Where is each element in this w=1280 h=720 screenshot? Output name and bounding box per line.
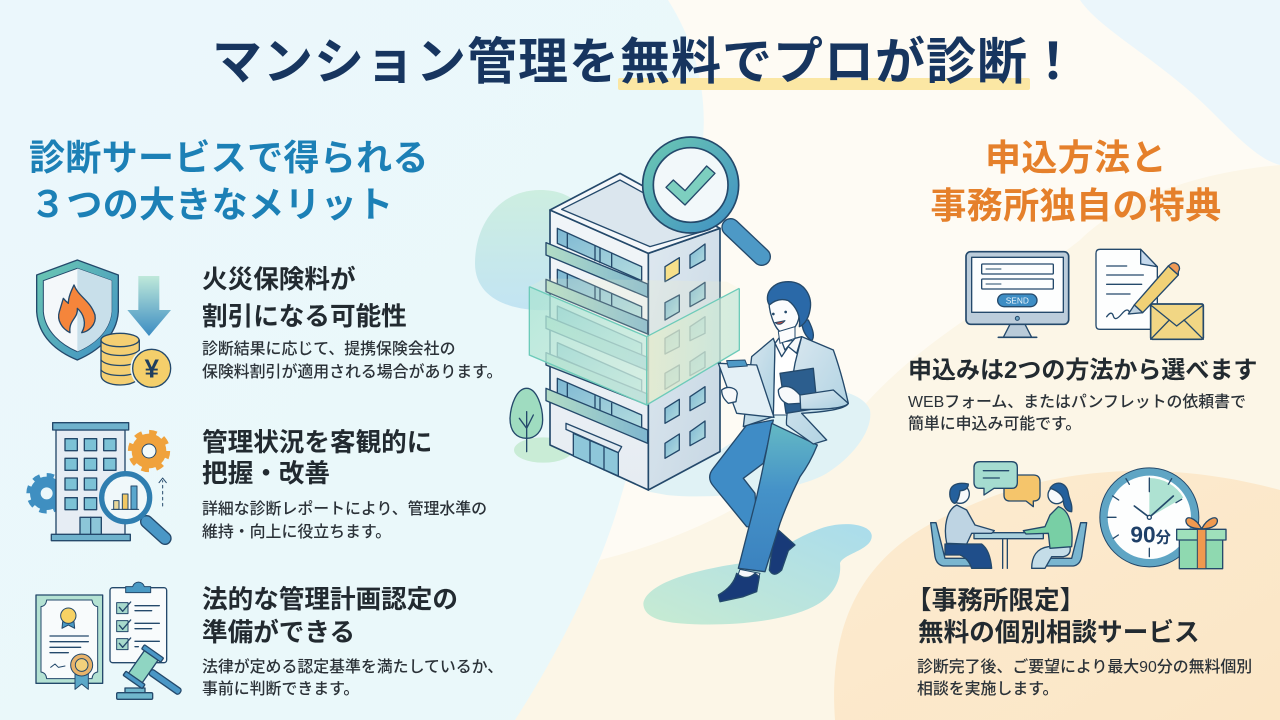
text: office-limited consultation	[906, 586, 1252, 698]
text: legal certification: 事前に判断できます。	[202, 680, 359, 698]
text: management status: 維持・向上に役立ちます。	[202, 523, 391, 541]
text: application methods	[908, 357, 1257, 433]
heading: merits	[29, 137, 429, 225]
heading: application and benefit: 事務所独自の特典	[930, 185, 1222, 226]
text: fire insurance: 火災保険料が	[202, 264, 356, 294]
text: office-limited consultation: 無料の個別相談サービス	[918, 618, 1200, 647]
icon: paper form, pencil and envelope	[1096, 249, 1203, 339]
text: office-limited consultation: 診断完了後、ご要望により最大90分の無料個別	[917, 658, 1252, 676]
text: legal certification: 準備ができる	[202, 617, 355, 647]
title text: マンション管理を無料でプロが診断！	[212, 34, 1079, 90]
text: legal certification	[202, 585, 503, 698]
icon: fire insurance discount: ¥	[144, 353, 159, 383]
translucent highlight floor band	[529, 278, 739, 405]
text: legal certification: 法的な管理計画認定の	[202, 585, 458, 614]
text: application methods: 簡単に申込み可能です。	[908, 414, 1081, 433]
icon: clock 90 minutes and gift: 90分	[1130, 522, 1172, 548]
text: management status: 把握・改善	[202, 459, 330, 488]
ground shadow	[643, 524, 872, 624]
tree	[510, 388, 573, 463]
icon: consultation meeting	[931, 462, 1087, 568]
title highlight underline	[618, 78, 1030, 90]
text: fire insurance: 保険料割引が適用される場合があります。	[202, 362, 502, 381]
blob behind person	[648, 389, 870, 496]
blob behind building	[475, 190, 577, 310]
heading: application and benefit: 申込方法と	[985, 137, 1167, 178]
text: fire insurance: 診断結果に応じて、提携保険会社の	[202, 340, 455, 358]
text: legal certification: 法律が定める認定基準を満たしているか、	[202, 657, 503, 676]
icon: fire insurance discount	[37, 260, 173, 390]
icon: certificate and gavel	[36, 582, 191, 708]
text: management status	[202, 428, 487, 541]
text: fire insurance	[202, 264, 502, 381]
text: application methods: WEBフォーム、またはパンフレットの依頼書で	[908, 393, 1246, 411]
person with clipboard	[710, 282, 848, 602]
icon: management analysis	[29, 423, 167, 541]
heading: application and benefit	[930, 137, 1222, 226]
heading: merits: ３つの大きなメリット	[30, 184, 394, 225]
text: office-limited consultation: 【事務所限定】	[906, 586, 1085, 615]
icon: web form on monitor: SEND	[1006, 296, 1029, 306]
text: fire insurance: 割引になる可能性	[202, 302, 407, 331]
text: management status: 管理状況を客観的に	[202, 428, 432, 457]
icon: clock 90 minutes and gift	[1100, 468, 1226, 569]
text: management status: 詳細な診断レポートにより、管理水準の	[202, 500, 487, 518]
magnifying glass with check	[643, 137, 762, 257]
building	[546, 173, 720, 490]
title	[212, 34, 1079, 90]
icon: web form on monitor	[966, 252, 1069, 337]
text: application methods: 申込みは2つの方法から選べます	[908, 357, 1257, 384]
text: office-limited consultation: 相談を実施します。	[917, 680, 1058, 698]
central illustration: building inspection	[475, 137, 872, 624]
heading: merits: 診断サービスで得られる	[29, 137, 429, 178]
